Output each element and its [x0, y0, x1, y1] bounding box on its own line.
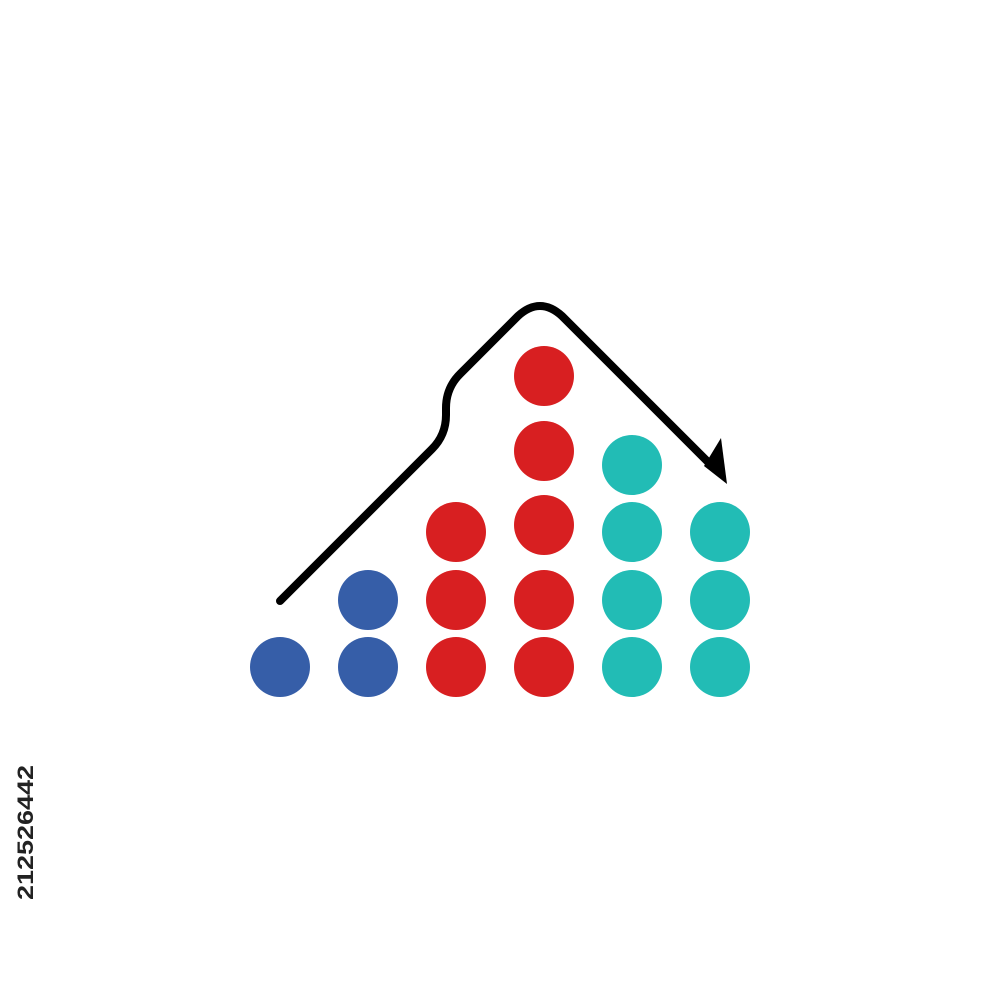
dots: red column 4 [514, 346, 574, 697]
dots: blue column 1 [250, 637, 310, 697]
dots: red column 3 [426, 502, 486, 697]
arrow: rise and fall trend [280, 306, 727, 601]
dots: teal column 6 [690, 502, 750, 697]
dots: blue column 2 [338, 570, 398, 697]
dots: teal column 5 [602, 435, 662, 697]
side id text: 212526442 [13, 765, 38, 900]
